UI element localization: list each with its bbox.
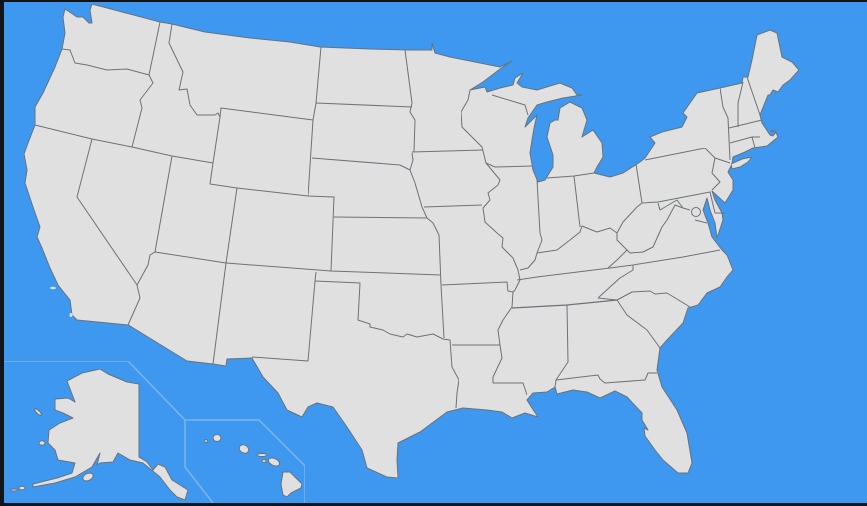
Long Island [731,157,752,169]
Hawaii [204,434,302,497]
state borders: midwest [461,90,720,292]
inset frames: Alaska and Hawaii [4,361,305,503]
Washington DC marker [692,208,700,216]
state borders: New England [720,77,762,160]
state borders: southeast [512,265,690,387]
California channel islands [50,287,72,317]
state borders: mid-Atlantic [608,148,730,268]
Alaska [10,369,188,500]
state borders: plains [308,47,527,395]
state borders: west [35,22,459,408]
